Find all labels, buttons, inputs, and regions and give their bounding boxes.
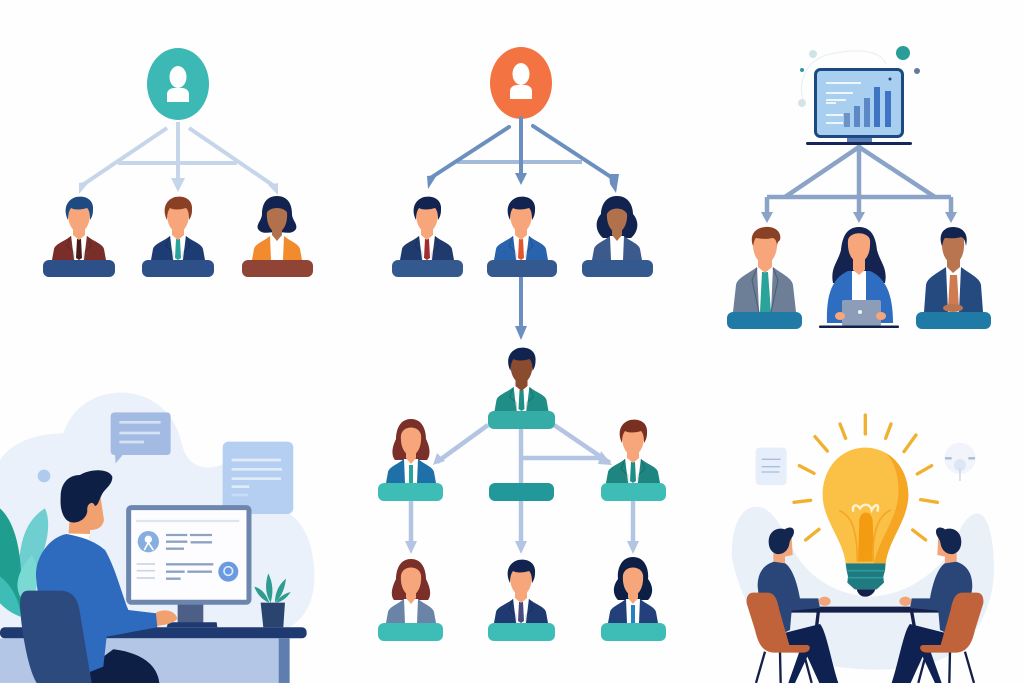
team member 3 [242,196,313,277]
right participant with chair [892,528,983,683]
middle tier: man [601,420,666,501]
team member: navy suit [392,197,463,277]
panel: teal manager org chart [43,48,313,277]
light bulb [823,448,908,597]
team member: navy suit, clasped hands [916,227,991,329]
team member: grey suit [727,227,802,329]
arrows: orange manager to team [427,118,619,193]
department lead [488,348,555,429]
monitor [129,508,249,624]
team member: blue suit [487,197,557,277]
arrows: department lead to teams [405,425,639,554]
panel: dashboard cascade [727,46,991,329]
panel: orange manager org chart [392,47,653,340]
arrows: dashboard to team [761,145,957,223]
team member: long hair [582,196,653,277]
dot [38,470,50,482]
manager badge: teal [147,48,209,120]
lower tier: woman, navy blazer [601,557,666,641]
office chair [20,591,92,683]
meeting table [789,607,940,640]
decorative dots around dashboard [798,46,920,107]
left participant with chair [747,528,838,683]
middle tier: empty desk [489,483,554,501]
dashboard monitor [806,70,912,145]
panel: team idea meeting [732,415,994,683]
document card [223,442,293,514]
middle tier: woman [378,419,443,501]
background blob [0,393,314,628]
plant leaves [0,508,48,617]
arrows: teal manager to team [79,122,278,195]
manager badge: orange [490,47,552,119]
panel: employee at computer [0,393,314,683]
speech bubble [111,412,171,463]
team member 2 [142,197,214,277]
lower tier: woman, grey blazer [378,559,443,641]
panel: department tree [378,348,666,641]
desk [0,622,307,683]
background blob [732,507,994,670]
team member: woman with laptop [819,227,899,328]
employee [36,470,177,683]
lower tier: man [488,560,555,641]
document icon [756,448,787,485]
light bulb rays [794,415,937,540]
team member 1 [43,197,115,277]
arrow: team to department lead [515,277,527,340]
potted plant [254,573,291,627]
idea icon [944,443,976,481]
